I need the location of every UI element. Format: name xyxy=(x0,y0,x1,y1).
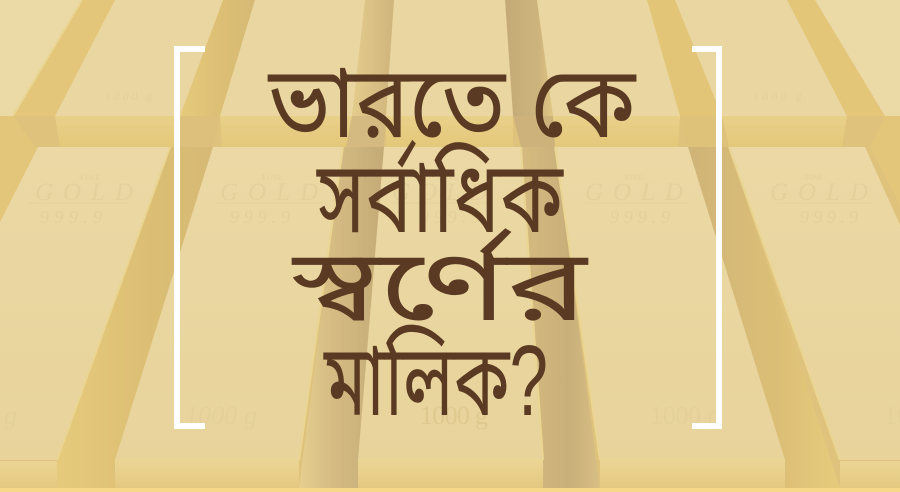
headline: মালিক? xyxy=(323,324,548,437)
embossed bar markings: GOLD xyxy=(585,179,683,206)
embossed bar markings xyxy=(4,89,900,430)
headline: স্বর্ণের xyxy=(292,228,589,342)
headline: সর্বাধিক xyxy=(316,140,564,254)
embossed bar markings: FINE xyxy=(262,173,282,182)
headline xyxy=(268,47,637,437)
embossed bar markings: 1000 g xyxy=(185,401,257,430)
embossed bar markings: 999.9 xyxy=(230,207,290,227)
embossed bar markings: FINE xyxy=(80,173,100,182)
embossed rule lines xyxy=(28,202,873,204)
embossed bar markings: GOLD xyxy=(220,179,318,206)
embossed bar markings: FINE xyxy=(805,173,823,182)
front row gaps xyxy=(0,147,840,488)
embossed bar markings: g xyxy=(4,401,17,430)
embossed bar markings: GOLD xyxy=(770,179,868,206)
front row lower faces xyxy=(0,461,900,488)
right bracket xyxy=(692,49,719,426)
front row bars xyxy=(0,147,900,460)
embossed bar markings: 999.9 xyxy=(610,207,670,227)
bottom strip xyxy=(0,488,900,492)
embossed bar markings: 1000 g xyxy=(753,89,802,103)
embossed bar markings: 1000 g xyxy=(650,401,720,430)
embossed bar markings: 999.9 xyxy=(40,207,102,227)
back row bars xyxy=(0,0,900,116)
headline: ভারতে কে xyxy=(268,47,637,159)
embossed bar markings: 999.9 xyxy=(420,207,480,227)
embossed bar markings: FINE xyxy=(625,173,643,182)
left bracket xyxy=(177,49,205,426)
embossed bar markings: 999.9 xyxy=(800,207,858,227)
embossed bar markings: GOLD xyxy=(392,179,487,206)
embossed bar markings: FINE xyxy=(438,173,458,182)
embossed bar markings: GOLD xyxy=(35,179,133,206)
embossed bar markings: 1000 g xyxy=(420,401,488,430)
embossed bar markings: 1000 g xyxy=(105,89,152,103)
back row gaps xyxy=(15,0,885,116)
back row front faces xyxy=(0,116,900,205)
